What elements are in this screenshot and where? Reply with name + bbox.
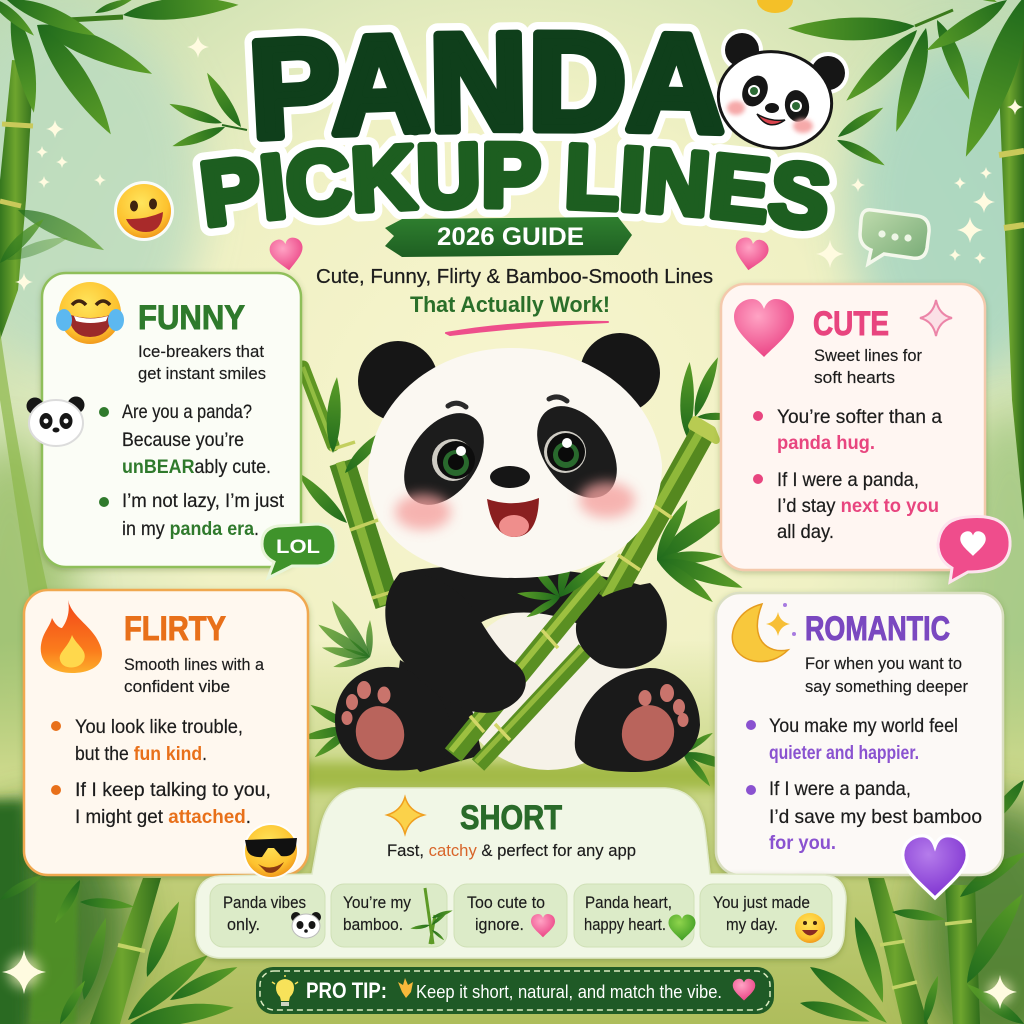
icon: coin at top edge: [757, 0, 793, 13]
romantic bullet lines: I’d save my best bamboo: [769, 806, 982, 828]
icon: gold star: [398, 978, 413, 998]
panda illustration: [335, 333, 716, 772]
chip: you're my bamboo: [331, 884, 453, 947]
title leaves: [167, 70, 887, 169]
panda eye patches: [388, 398, 500, 520]
flirty description: confident vibe: [124, 678, 230, 696]
chip: you're my bamboo: You’re my: [343, 894, 412, 912]
panel: short: [196, 788, 846, 958]
chip: too cute to ignore: ignore.: [475, 916, 524, 934]
cute bullet lines: panda hug.: [777, 432, 875, 454]
funny bullet lines: [99, 401, 285, 540]
funny bullet lines: unBEARably cute.: [122, 456, 271, 478]
flirty description: Smooth lines with a: [124, 656, 265, 674]
ribbon: 2026 GUIDE: [385, 217, 632, 257]
left bamboo background: [0, 0, 239, 600]
chip: panda heart: happy heart.: [584, 916, 666, 934]
flirty description: [124, 656, 265, 696]
bottom-left bamboo: [0, 800, 240, 1024]
cute bullet lines: I’d stay next to you: [777, 495, 939, 517]
heading: cute: CUTE: [813, 305, 889, 343]
title: PICKUP LINES: PICKUP LINES: [192, 133, 837, 238]
heading: flirty: FLIRTY: [124, 610, 226, 648]
chip: too cute to ignore: [454, 884, 567, 947]
icon: light bulb: [272, 975, 298, 1006]
short description: Fast, catchy & perfect for any app: [387, 841, 636, 860]
panda cheeks: [395, 494, 451, 530]
chip: too cute to ignore: Too cute to: [467, 894, 545, 912]
flirty bullet lines: I might get attached.: [75, 806, 251, 828]
flirty bullet lines: If I keep talking to you,: [75, 779, 271, 801]
panda right foot: [575, 668, 700, 772]
right bamboo background: [788, 0, 1024, 520]
cute description: Sweet lines for: [814, 347, 923, 365]
flirty bullet lines: You look like trouble,: [75, 716, 243, 738]
chip: you're my bamboo: bamboo.: [343, 916, 403, 934]
icon: crescent moon: [732, 603, 796, 662]
icon: smiling emoji: [114, 181, 174, 241]
icon: title panda head: [709, 29, 849, 159]
panda left foot: [335, 667, 452, 770]
romantic bullet lines: quieter and happier.: [769, 742, 919, 764]
funny description: [138, 343, 266, 383]
funny bullet lines: in my panda era.: [122, 518, 259, 540]
romantic bullet lines: If I were a panda,: [769, 778, 911, 800]
panda right arm: [576, 583, 667, 669]
pro tip text: Keep it short, natural, and match the vibe.: [416, 982, 722, 1002]
funny bullet lines: Because you’re: [122, 429, 244, 451]
panda ears: [358, 341, 438, 421]
cute bullet lines: You’re softer than a: [777, 406, 942, 428]
romantic description: [805, 655, 968, 696]
chip: you just made my day: You just made: [713, 894, 810, 912]
panel: funny: [42, 273, 301, 567]
cute description: [814, 347, 923, 387]
flirty bullet lines: [51, 716, 271, 828]
chip: panda vibes: only.: [227, 916, 260, 934]
romantic bullet lines: [746, 715, 982, 854]
panda torso: [400, 566, 658, 633]
panel: romantic: [716, 593, 1003, 875]
icon: fire: [41, 600, 102, 673]
romantic description: say something deeper: [805, 678, 968, 696]
icon: hearts beside ribbon: [268, 236, 770, 273]
title: PICKUP LINES: PICKUP LINES: [200, 140, 830, 231]
panda left thigh: [390, 660, 482, 772]
panda eyes: [432, 439, 474, 481]
heading: romantic: ROMANTIC: [805, 610, 950, 648]
chip: you just made my day: [700, 884, 832, 947]
romantic bullet lines: You make my world feel: [769, 715, 958, 737]
central bamboo behind panda: [293, 355, 746, 788]
icon: sunglasses emoji: [243, 823, 299, 879]
icon: laughing emoji: [56, 282, 124, 344]
romantic bullet lines: for you.: [769, 832, 836, 854]
cute bullet lines: If I were a panda,: [777, 469, 919, 491]
chip: you just made my day: my day.: [726, 916, 778, 934]
icon: heart: [733, 979, 755, 1000]
panel: flirty: [24, 590, 308, 875]
subtitle: Cute, Funny, Flirty & Bamboo-Smooth Lines: [316, 266, 713, 288]
icon: purple heart: [903, 836, 967, 898]
pro tip bar: [256, 967, 774, 1014]
panda nose and mouth: [490, 466, 530, 488]
heading: funny: FUNNY: [138, 299, 245, 337]
funny bullet lines: I’m not lazy, I’m just: [122, 490, 285, 512]
panda belly: [458, 606, 638, 770]
icon: pink heart: [734, 299, 794, 357]
icon: green chat bubble: [860, 210, 929, 264]
cute bullet lines: all day.: [777, 521, 834, 543]
icon: LOL speech bubble: LOL: [276, 537, 320, 558]
romantic description: For when you want to: [805, 655, 962, 673]
title: PANDA: PANDA: [244, 22, 732, 148]
title: PANDA: PANDA: [252, 30, 725, 142]
heading: short: SHORT: [460, 799, 562, 837]
chip: panda heart: [574, 884, 696, 947]
subtitle: That Actually Work!: [410, 292, 610, 317]
icon: heart speech bubble: [938, 517, 1010, 582]
chip: panda vibes: Panda vibes: [223, 894, 306, 912]
panda left arm: [385, 573, 526, 713]
chip: panda heart: Panda heart,: [585, 894, 672, 912]
panel: cute: [721, 284, 985, 570]
funny bullet lines: Are you a panda?: [122, 401, 252, 423]
funny description: Ice-breakers that: [138, 343, 264, 361]
funny description: get instant smiles: [138, 365, 266, 383]
icon: gold sparkle: [387, 797, 424, 834]
bottom-right bamboo: [799, 777, 1024, 1024]
icon: LOL speech bubble: [262, 524, 336, 578]
bamboo held by panda: [451, 420, 716, 765]
panda head: [368, 348, 662, 578]
icon: small panda sticker: [26, 396, 84, 446]
flirty bullet lines: but the fun kind.: [75, 743, 207, 765]
pro tip label: PRO TIP:: [306, 978, 387, 1003]
sparkles: [15, 36, 1023, 291]
cute bullet lines: [753, 406, 942, 543]
subtitle: [316, 266, 713, 335]
icon: pink sparkle: [920, 300, 952, 336]
ribbon: 2026 GUIDE: 2026 GUIDE: [437, 223, 584, 251]
cute description: soft hearts: [814, 369, 895, 387]
chip: panda vibes: [210, 884, 325, 947]
